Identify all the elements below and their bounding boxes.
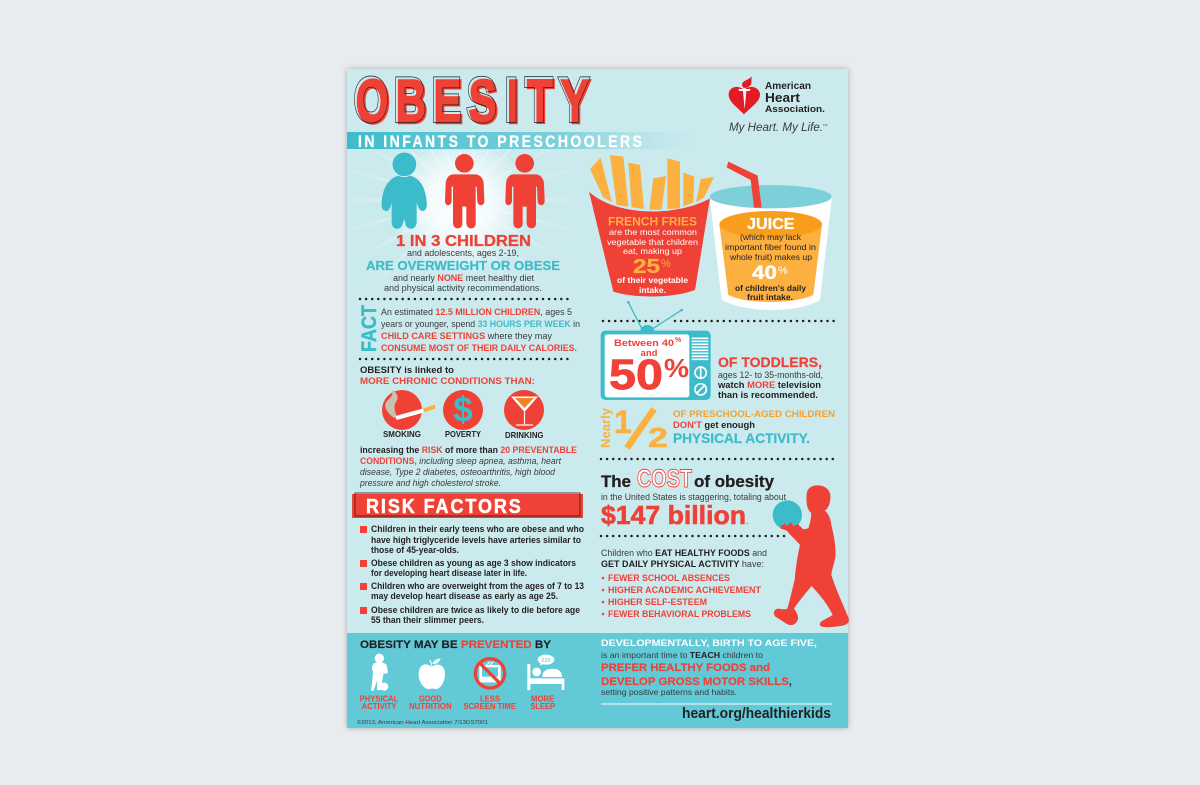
text block: healthy foods benefits: Children who EAT HEALTHY FOODS and (601, 548, 767, 558)
list: benefits (602, 573, 762, 619)
icon: television: 50 (609, 351, 663, 399)
illustration: juice glass: whole fruit) makes up (729, 252, 812, 262)
text block: 1 in 3 children: and nearly NONE meet healthy diet (393, 273, 534, 283)
illustration: juice glass: fruit intake. (747, 292, 793, 302)
text block: toddlers: than is recommended. (718, 390, 818, 400)
logo: American Heart Association: Association. (765, 104, 825, 115)
illustration: french fries: are the most common (609, 227, 697, 237)
icon: good nutrition: NUTRITION (409, 702, 452, 711)
text block: developmentally (601, 638, 817, 697)
icon: television: % (675, 337, 682, 344)
text block: fact: CONSUME MOST OF THEIR DAILY CALORIES. (381, 343, 577, 353)
text block: developmentally: setting positive patterns and habits. (601, 687, 737, 697)
text block: the cost of obesity: in the United States is staggering, totaling about (601, 492, 787, 502)
stat: one half: Nearly (599, 408, 613, 448)
bottom band (347, 633, 848, 728)
heading: chronic conditions: MORE CHRONIC CONDITIONS THAN: (360, 376, 535, 386)
illustration: french fries: of their vegetable (617, 275, 688, 285)
text block: fact: An estimated 12.5 MILLION CHILDREN, ages 5 (381, 307, 572, 317)
icon: three children figures (382, 152, 545, 229)
text block: physical activity: DON'T get enough (673, 420, 755, 430)
text block: the cost of obesity: COST (637, 465, 692, 493)
text block: healthy foods benefits (601, 548, 767, 619)
text block: 1 in 3 children: ARE OVERWEIGHT OR OBESE (366, 258, 560, 273)
text block: 1 in 3 children: and physical activity recommendations. (384, 283, 542, 293)
text block: the cost of obesity: The (601, 472, 631, 491)
text block: developmentally: DEVELOPMENTALLY, BIRTH TO AGE FIVE, (601, 638, 817, 649)
copyright: ©2013, American Heart Association 7/13DS7001 (357, 719, 488, 726)
illustration: juice glass: JUICE (747, 216, 795, 233)
text block: physical activity: OF PRESCHOOL-AGED CHILDREN (673, 409, 835, 419)
icon: poverty: $ (453, 390, 473, 430)
text block: fact: CHILD CARE SETTINGS where they may (381, 331, 553, 341)
text block: fact (381, 307, 580, 353)
stat: one half: 1 (614, 404, 632, 440)
list: risk factors: for developing heart disease later in life. (371, 568, 527, 578)
url: heart.org/healthierkids (682, 706, 831, 722)
subtitle band: IN INFANTS TO PRESCHOOLERS (358, 133, 642, 151)
logo: American Heart Association: My Heart. My Life. (729, 120, 823, 134)
poster background panel (347, 69, 848, 728)
list: risk factors: those of 45-year-olds. (371, 545, 459, 555)
illustration: french fries: % (661, 258, 671, 270)
text block: developmentally: DEVELOP GROSS MOTOR SKILLS , (601, 676, 792, 688)
text block: the cost of obesity: $147 billion (601, 500, 746, 530)
icon: drinking: DRINKING (505, 430, 544, 440)
text block: healthy foods benefits: GET DAILY PHYSICAL ACTIVITY have: (601, 559, 764, 569)
text block: toddlers: watch MORE television (717, 380, 821, 390)
icon: poverty (443, 390, 483, 439)
heading: chronic conditions (360, 365, 535, 386)
text block: preventable conditions: disease, Type 2 diabetes, osteoarthritis, high blood (360, 467, 556, 477)
stat: one half: 2 (648, 422, 668, 453)
list: benefits: FEWER SCHOOL ABSENCES (608, 573, 730, 583)
text block: developmentally: PREFER HEALTHY FOODS and (601, 662, 770, 674)
text block: preventable conditions: CONDITIONS, including sleep apnea, asthma, heart (360, 456, 561, 466)
text block: preventable conditions (359, 445, 577, 488)
stat: one half (599, 404, 668, 453)
text block: preventable conditions: pressure and high cholesterol stroke. (359, 478, 501, 488)
heading: prevented by: OBESITY MAY BE PREVENTED BY (360, 639, 552, 651)
illustration: french fries: vegetable that children (607, 237, 698, 247)
text block: 1 in 3 children: 1 IN 3 CHILDREN (396, 233, 531, 250)
heading: risk factors (352, 493, 583, 518)
icon: drinking (504, 390, 544, 440)
icon: more sleep: MORE (531, 695, 555, 704)
icon: physical activity: ACTIVITY (362, 702, 397, 711)
icon: child figure 3 (505, 154, 545, 228)
icon: television (601, 301, 711, 400)
text block: developmentally: is an important time to TEACH children to (601, 650, 763, 660)
icon: smoking (382, 390, 436, 439)
text block: fact: years or younger, spend 33 HOURS PER WEEK in (381, 319, 580, 329)
list: benefits: HIGHER SELF-ESTEEM (608, 597, 707, 607)
icon: good nutrition: GOOD (419, 695, 442, 704)
text block: the cost of obesity (601, 465, 787, 530)
text block: the cost of obesity: of obesity (694, 472, 775, 491)
icon: overweight child (382, 152, 427, 229)
fries sticks (590, 155, 714, 210)
illustration: juice glass (710, 162, 832, 310)
icon: physical activity: PHYSICAL (360, 695, 398, 704)
illustration: juice glass: important fiber found in (725, 242, 816, 252)
text block: toddlers: ages 12- to 35-months-old, (718, 370, 823, 380)
decorative sun rays (376, 150, 542, 274)
heading: chronic conditions: OBESITY is linked to (360, 365, 454, 376)
illustration: french fries: eat, making up (623, 246, 682, 256)
icon: more sleep: ZZZ (541, 657, 551, 663)
text block: physical activity (673, 409, 835, 446)
icon: less screen time: SCREEN TIME (463, 702, 517, 711)
list: risk factors: Children who are overweight from the ages of 7 to 13 (371, 581, 584, 591)
text block: the cost of obesity: . (746, 516, 749, 526)
list: risk factors: have high triglyceride levels have arteries similar to (371, 535, 582, 545)
logo: American Heart Association: Heart (765, 90, 801, 105)
logo: American Heart Association: TM (823, 123, 828, 127)
list: risk factors: Obese children as young as age 3 show indicators (371, 558, 576, 568)
fact label: FACT (358, 305, 381, 352)
list: risk factors: 55 than their slimmer peers. (371, 615, 484, 625)
list: benefits: FEWER BEHAVIORAL PROBLEMS (608, 609, 751, 619)
glass body (710, 197, 832, 310)
icon: good nutrition (409, 659, 452, 711)
icon: child figure 2 (445, 154, 484, 228)
straw (727, 162, 762, 208)
title: OBESITY: OBESITY (356, 70, 590, 136)
illustration: french fries: 25 (633, 256, 660, 278)
icon: television: % (664, 353, 689, 383)
illustration: juice glass: % (778, 265, 788, 277)
icon: more sleep: SLEEP (530, 702, 556, 711)
icon: television: and (641, 348, 658, 359)
text block: toddlers: OF TODDLERS, (718, 355, 822, 370)
illustration: child with ball (773, 485, 849, 627)
text block: 1 in 3 children: and adolescents, ages 2-19, (407, 248, 519, 258)
list: benefits: HIGHER ACADEMIC ACHIEVEMENT (608, 585, 762, 595)
icon: smoking: SMOKING (383, 429, 421, 439)
juice (719, 224, 822, 302)
logo: American Heart Association: American (765, 81, 811, 92)
icon: television: Between 40 (614, 338, 674, 349)
fries carton (589, 192, 710, 296)
icon: less screen time: LESS (480, 695, 501, 704)
logo: American Heart Association (729, 76, 828, 134)
list: risk factors: may develop heart disease as early as age 25. (371, 591, 558, 601)
list: risk factors: Children in their early teens who are obese and who (371, 524, 585, 534)
text block: 1 in 3 children (366, 233, 560, 293)
text block: physical activity: PHYSICAL ACTIVITY. (673, 431, 810, 446)
icon: more sleep (527, 655, 564, 711)
list: risk factors (360, 524, 585, 625)
icon: less screen time (463, 659, 517, 711)
text block: preventable conditions: increasing the RISK of more than 20 PREVENTABLE (360, 445, 577, 455)
title: OBESITY: OBESITY (354, 68, 588, 134)
illustration: juice glass: of children's daily (735, 283, 806, 293)
icon: poverty: POVERTY (445, 429, 481, 439)
list: risk factors: Obese children are twice as likely to die before age (371, 605, 580, 615)
icon: physical activity (360, 654, 398, 711)
illustration: french fries (589, 155, 714, 296)
illustration: juice glass: 40 (752, 263, 777, 284)
text block: toddlers (717, 355, 823, 400)
heading: risk factors: RISK FACTORS (366, 496, 521, 518)
illustration: french fries: intake. (639, 285, 666, 295)
illustration: french fries: FRENCH FRIES (608, 214, 697, 228)
illustration: juice glass: (which may lack (740, 232, 802, 242)
